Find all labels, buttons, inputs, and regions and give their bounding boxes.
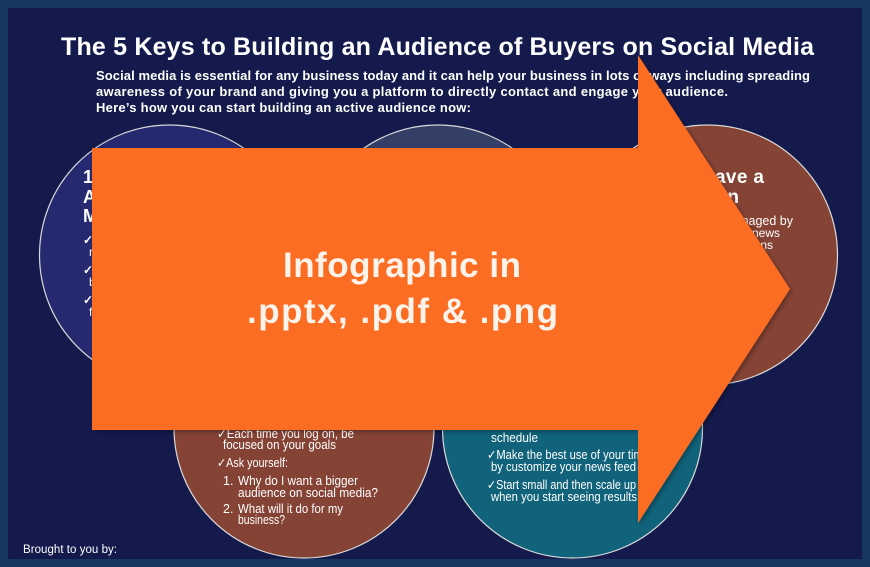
panel: key 4 circle: What will it do for my	[238, 502, 344, 516]
panel: key 5 circle: schedule	[491, 431, 538, 445]
title: The 5 Keys to Building an Audience of Buyers on Social Media	[61, 33, 815, 61]
panel: key 4 circle: ✓Each time you log on, be	[217, 427, 354, 441]
panel: key 5 circle: ✓Start small and then scale up	[487, 478, 636, 492]
panel: key 3 circle	[578, 125, 838, 385]
panel: key 5 circle	[442, 298, 702, 558]
credit line: Brought to you by:	[23, 544, 117, 556]
panel: key 4 circle: Why do I want a bigger	[238, 474, 358, 488]
intro text: Here’s how you can start building an active audience now:	[96, 100, 471, 115]
panel: key 1 circle: b	[89, 275, 96, 289]
panel: key 4 circle: ✓Ask yourself:	[217, 456, 288, 470]
arrow label: .pptx, .pdf & .png	[247, 292, 558, 331]
intro text: awareness of your brand and giving you a platform to directly contact and engage your audience.	[96, 84, 728, 99]
panel: key 1 circle	[40, 125, 300, 385]
panel: key 5 circle: ✓Make the best use of your time	[487, 448, 649, 462]
panel: key 3 circle: naged by	[742, 214, 794, 228]
panel: key 3 circle: ave a	[715, 167, 764, 188]
panel: key 4 circle	[174, 298, 434, 558]
panel: key 3 circle: news	[752, 226, 780, 240]
panel: key 5 circle: by customize your news feed	[491, 460, 636, 474]
arrow label: Infographic in	[283, 246, 521, 285]
panel: key 1 circle: ✓	[83, 293, 93, 307]
intro text: Social media is essential for any business today and it can help your business in lots of ways including spreading	[96, 68, 810, 83]
panel: key 4 circle: focused on your goals	[223, 438, 336, 452]
panel: key 4 circle: 1.	[223, 474, 233, 488]
panel: key 3 circle: n	[727, 187, 739, 208]
intro text	[96, 68, 810, 115]
panel: key 4 circle: audience on social media?	[238, 486, 378, 500]
panel: key 1 circle: ✓	[83, 263, 93, 277]
panel: key 4 circle: 2.	[223, 502, 233, 516]
panel: key 1 circle: A	[83, 187, 96, 207]
panel: key 4 circle: business?	[238, 513, 285, 527]
panel: key 2 circle	[308, 125, 568, 385]
panel: key 1 circle: r	[89, 245, 93, 259]
panel: key 1 circle: f	[89, 305, 93, 319]
arrow label	[247, 246, 558, 331]
panel: key 1 circle: 1	[83, 167, 93, 187]
panel: key 1 circle: ✓	[83, 233, 93, 247]
orange arrow overlay	[92, 55, 790, 523]
panel: key 3 circle: ns	[760, 238, 773, 252]
panel: key 1 circle: M	[83, 206, 98, 226]
panel: key 5 circle: when you start seeing results	[490, 490, 637, 504]
